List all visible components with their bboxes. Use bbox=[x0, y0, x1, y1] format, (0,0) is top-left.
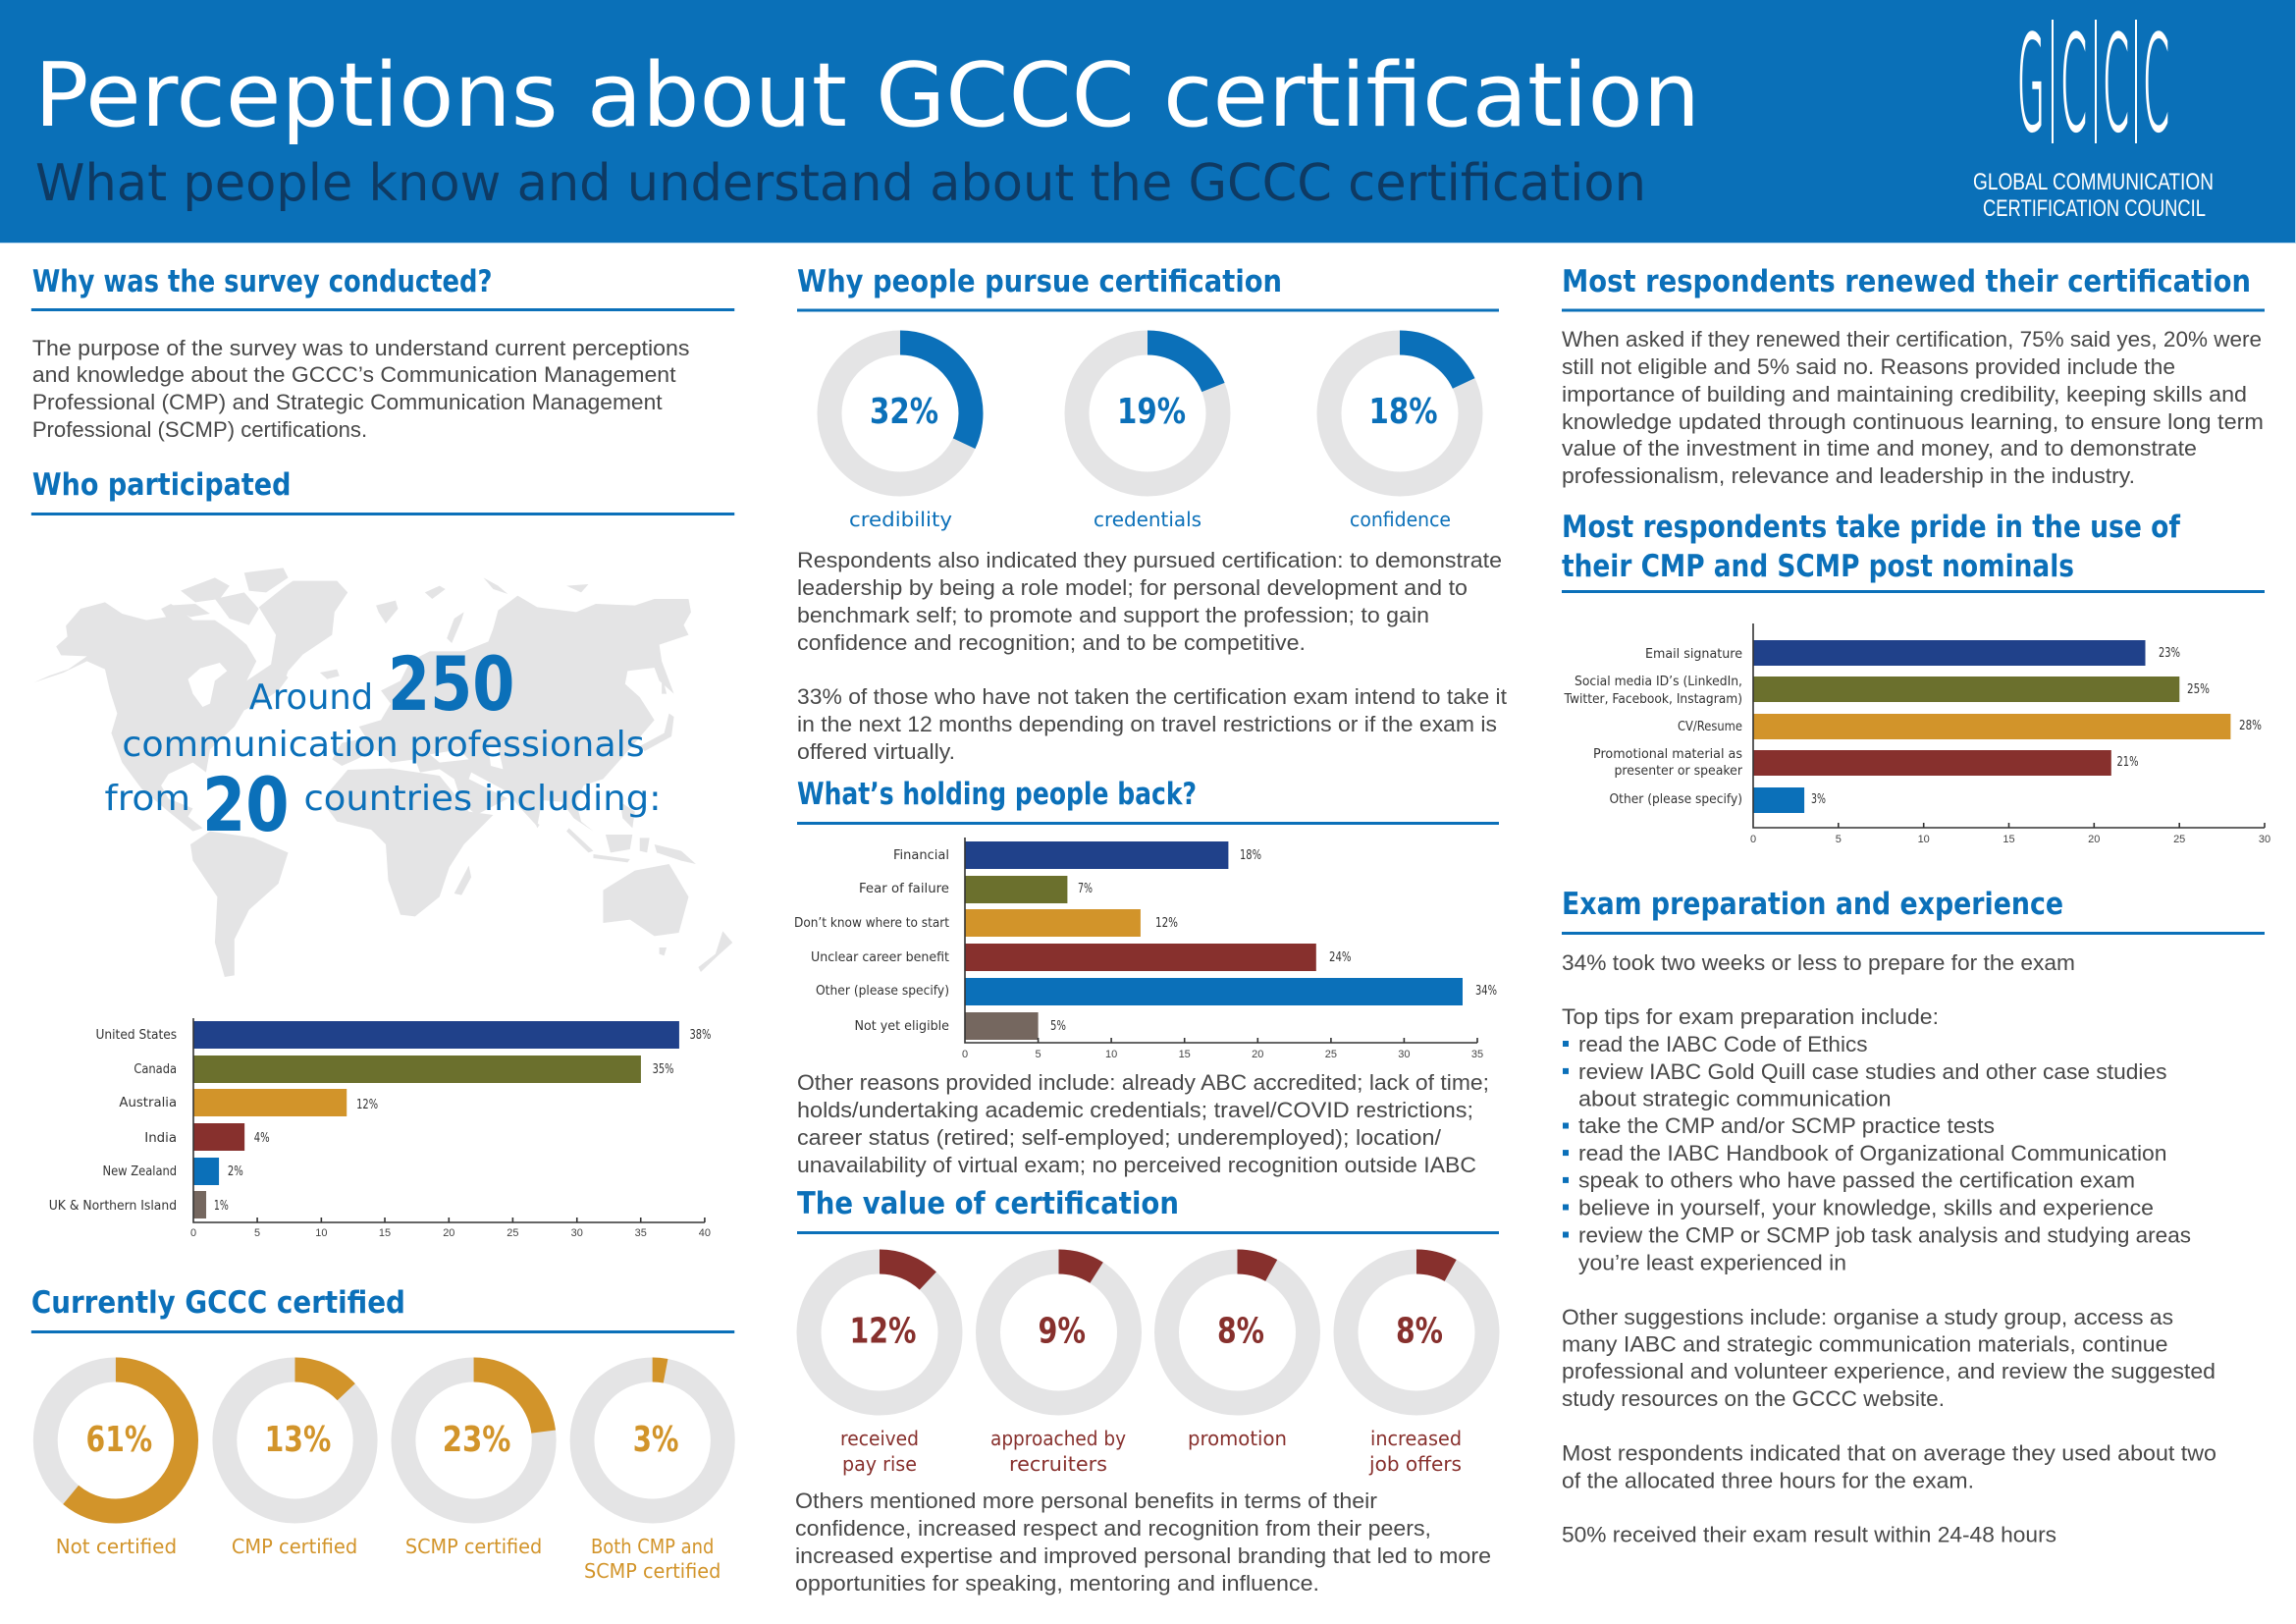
text: other suggestions: many IABC and strategic communication materials, continue bbox=[1562, 1331, 2167, 1357]
text: other suggestions: Other suggestions include: organise a study group, access as bbox=[1562, 1305, 2173, 1329]
donut: increased job offers 8%: 8% bbox=[1396, 1312, 1443, 1351]
text: exam time and results: of the allocated three hours for the exam. bbox=[1562, 1469, 1974, 1492]
heading: What’s holding people back? bbox=[797, 777, 1197, 812]
logo: GCCC: C bbox=[2143, 8, 2169, 161]
heading: Why people pursue certification bbox=[797, 264, 1282, 299]
bar: Other bbox=[1610, 787, 1826, 813]
bar chart: post nominal use: 5 bbox=[1836, 834, 1842, 845]
donut: received pay rise 12% bbox=[809, 1262, 950, 1476]
heading: Most respondents take pride in the use of bbox=[1562, 510, 2180, 545]
bar: New Zealand: New Zealand bbox=[102, 1164, 177, 1179]
heading: Currently GCCC certified bbox=[31, 1285, 405, 1321]
callout: participants: from bbox=[104, 779, 190, 819]
bar chart: post nominal use: 15 bbox=[2002, 834, 2015, 845]
text: other suggestions: study resources on the GCCC website. bbox=[1562, 1386, 1945, 1411]
bar: Financial bbox=[893, 841, 1261, 869]
text block: leadership by being a role model; for personal development and to bbox=[797, 575, 1468, 600]
text block: offered virtually. bbox=[797, 739, 955, 764]
text block: in the next 12 months depending on travel restrictions or if the exam is bbox=[797, 712, 1497, 736]
text block: professionalism, relevance and leadership in the industry. bbox=[1562, 463, 2135, 488]
bar: Canada: Canada bbox=[133, 1062, 177, 1077]
bar chart: countries: 15 bbox=[379, 1227, 391, 1239]
bar: Social media: 25% bbox=[2187, 681, 2210, 697]
text: exam time and results: Most respondents indicated that on average they used about two bbox=[1562, 1441, 2216, 1465]
bar chart: barriers: 35 bbox=[1471, 1049, 1483, 1060]
bulleted list: exam tips: review IABC Gold Quill case studies and other case studies bbox=[1578, 1059, 2167, 1084]
world map bbox=[34, 568, 732, 977]
bar: UK and Northern Island: UK & Northern Island bbox=[49, 1199, 177, 1214]
donut: CMP certified 13%: CMP certified bbox=[232, 1535, 357, 1558]
bar chart: countries bbox=[49, 1018, 712, 1239]
bar: Fear of failure bbox=[859, 876, 1093, 903]
text block: Professional (CMP) and Strategic Communication Management bbox=[32, 390, 663, 414]
donut: SCMP certified 23%: 23% bbox=[443, 1420, 510, 1460]
bar chart: post nominal use: 30 bbox=[2259, 834, 2270, 845]
text block: importance of building and maintaining credibility, keeping skills and bbox=[1562, 382, 2247, 406]
bulleted list: exam tips: about strategic communication bbox=[1578, 1086, 1891, 1111]
text: intro: 34% took two weeks or less to prepare for the exam bbox=[1562, 950, 2075, 975]
donut: received pay rise 12%: received bbox=[840, 1427, 919, 1450]
text block bbox=[797, 548, 1508, 764]
text block: Others mentioned more personal benefits in terms of their bbox=[795, 1489, 1378, 1513]
donut: approached by recruiters 9%: recruiters bbox=[1009, 1452, 1107, 1476]
bar: Social media bbox=[1564, 674, 2210, 707]
bar: Canada: 35% bbox=[653, 1062, 674, 1077]
bar: Not yet eligible: 5% bbox=[1050, 1018, 1066, 1034]
bar chart: barriers: 20 bbox=[1252, 1049, 1263, 1060]
text block: increased expertise and improved personal branding that led to more bbox=[795, 1543, 1491, 1568]
bar: Email signature: Email signature bbox=[1645, 646, 1742, 662]
logo: GCCC: C bbox=[2060, 8, 2087, 161]
donut: SCMP certified 23% bbox=[403, 1370, 544, 1558]
text block: value of the investment in time and money, and to demonstrate bbox=[1562, 436, 2197, 460]
text block: Professional (SCMP) certifications. bbox=[32, 417, 367, 442]
text block bbox=[797, 1070, 1489, 1177]
bar: Canada bbox=[133, 1056, 674, 1083]
text block: 33% of those who have not taken the certification exam intend to take it bbox=[797, 684, 1508, 709]
bar chart: countries: 30 bbox=[571, 1227, 583, 1239]
bar: CV/Resume: CV/Resume bbox=[1678, 719, 1742, 734]
callout: participants: countries including: bbox=[303, 779, 662, 819]
callout: participants: Around bbox=[249, 677, 373, 718]
bar: Social media: Social media ID’s (LinkedIn, bbox=[1575, 674, 1742, 689]
callout: participants: communication professionals bbox=[122, 725, 645, 765]
donut: SCMP certified 23%: SCMP certified bbox=[405, 1535, 542, 1558]
bar chart: barriers bbox=[794, 838, 1497, 1060]
donut: promotion 8% bbox=[1166, 1262, 1308, 1450]
donut: approached by recruiters 9%: approached by bbox=[990, 1427, 1126, 1450]
bar: Promotional material: 21% bbox=[2116, 754, 2139, 770]
text block: benchmark self; to promote and support the profession; to gain bbox=[797, 603, 1429, 627]
logo: GCCC: CERTIFICATION COUNCIL bbox=[1983, 195, 2206, 222]
text block: Respondents also indicated they pursued certification: to demonstrate bbox=[797, 548, 1502, 572]
bar chart: barriers: 30 bbox=[1398, 1049, 1411, 1060]
bar chart: barriers: 0 bbox=[962, 1049, 968, 1060]
text block bbox=[1562, 327, 2264, 488]
donut: CMP certified 13% bbox=[225, 1370, 365, 1558]
logo: GCCC bbox=[1973, 8, 2214, 222]
bar chart: post nominal use: 0 bbox=[1750, 834, 1756, 845]
donut: confidence 18%: confidence bbox=[1350, 508, 1451, 531]
panel: why was the survey conducted bbox=[31, 264, 734, 442]
bar: India: India bbox=[144, 1131, 177, 1146]
logo: GCCC: GLOBAL COMMUNICATION bbox=[1973, 169, 2214, 195]
donut: confidence 18%: 18% bbox=[1368, 392, 1437, 432]
logo: GCCC: G bbox=[2017, 8, 2045, 161]
bar: United States: 38% bbox=[689, 1028, 712, 1043]
bar chart: countries: 35 bbox=[635, 1227, 647, 1239]
bulleted list: exam tips: speak to others who have passed the certification exam bbox=[1578, 1168, 2135, 1192]
bar: Promotional material: Promotional material as bbox=[1593, 746, 1742, 762]
text block bbox=[795, 1489, 1491, 1596]
bar: Other bbox=[816, 978, 1497, 1005]
bar: Financial: 18% bbox=[1240, 847, 1261, 863]
bar: Australia bbox=[119, 1089, 378, 1116]
heading: Exam preparation and experience bbox=[1562, 887, 2063, 922]
bar chart: barriers: 15 bbox=[1179, 1049, 1191, 1060]
bar: Other: 3% bbox=[1811, 791, 1826, 807]
heading: The value of certification bbox=[797, 1186, 1179, 1221]
text block: When asked if they renewed their certification, 75% said yes, 20% were bbox=[1562, 327, 2262, 352]
bar: Unclear career benefit bbox=[811, 944, 1352, 971]
text block: and knowledge about the GCCC’s Communication Management bbox=[32, 362, 676, 387]
bar: New Zealand bbox=[102, 1158, 243, 1185]
subtitle: What people know and understand about the GCCC certification bbox=[35, 154, 1646, 213]
callout: participants: 20 bbox=[202, 762, 290, 848]
bar: Australia: Australia bbox=[119, 1096, 177, 1110]
bulleted list: exam tips: read the IABC Code of Ethics bbox=[1578, 1032, 1867, 1056]
bar: New Zealand: 2% bbox=[228, 1164, 243, 1179]
callout: participants bbox=[104, 641, 662, 848]
bar: Email signature: 23% bbox=[2159, 645, 2180, 661]
bar: Not yet eligible: Not yet eligible bbox=[854, 1018, 949, 1034]
bar chart: countries: 40 bbox=[699, 1227, 711, 1239]
text block: holds/undertaking academic credentials; travel/COVID restrictions; bbox=[797, 1098, 1473, 1122]
bar chart: barriers: 5 bbox=[1036, 1049, 1041, 1060]
donut: not certified 61%: Not certified bbox=[56, 1535, 177, 1558]
bar chart: post nominal use: 20 bbox=[2088, 834, 2100, 845]
heading bbox=[1562, 510, 2180, 584]
donut: received pay rise 12%: pay rise bbox=[842, 1452, 917, 1476]
bar chart: countries: 5 bbox=[254, 1227, 260, 1239]
donut: not certified 61%: 61% bbox=[86, 1420, 152, 1460]
donut: both certified 3% bbox=[582, 1370, 722, 1583]
panel: exam preparation and experience bbox=[1562, 887, 2265, 1547]
bulleted list: exam tips: believe in yourself, your knowledge, skills and experience bbox=[1578, 1196, 2154, 1219]
donut: credibility 32%: credibility bbox=[849, 508, 952, 531]
bar: UK and Northern Island bbox=[49, 1191, 229, 1218]
panel: currently GCCC certified bbox=[31, 1285, 734, 1583]
text block: opportunities for speaking, mentoring and influence. bbox=[795, 1571, 1319, 1596]
bar: Unclear career benefit: 24% bbox=[1329, 949, 1352, 965]
donut: increased job offers 8%: job offers bbox=[1368, 1452, 1462, 1476]
donut: credentials 19%: credentials bbox=[1094, 508, 1201, 531]
bar: Social media: Twitter, Facebook, Instagram) bbox=[1564, 691, 1742, 707]
header banner bbox=[0, 0, 2296, 244]
bulleted list: exam tips: you’re least experienced in bbox=[1578, 1251, 1846, 1274]
donut: increased job offers 8% bbox=[1346, 1262, 1487, 1476]
heading: Why was the survey conducted? bbox=[32, 264, 492, 299]
text block: The purpose of the survey was to understand current perceptions bbox=[32, 336, 689, 360]
bar: Email signature bbox=[1645, 640, 2180, 666]
donut: credibility 32% bbox=[829, 343, 971, 531]
donut: increased job offers 8%: increased bbox=[1370, 1427, 1462, 1450]
panel: what's holding people back bbox=[794, 777, 1499, 1177]
donut: credentials 19%: 19% bbox=[1117, 392, 1186, 432]
text: exam time and results bbox=[1562, 1441, 2216, 1547]
bar: Other: Other (please specify) bbox=[816, 983, 949, 999]
text block: Other reasons provided include: already ABC accredited; lack of time; bbox=[797, 1070, 1489, 1095]
panel: most respondents renewed bbox=[1562, 264, 2265, 488]
bar chart: post nominal use: 10 bbox=[1918, 834, 1930, 845]
text: exam time and results: 50% received their exam result within 24-48 hours bbox=[1562, 1522, 2056, 1547]
donut: promotion 8%: 8% bbox=[1217, 1312, 1264, 1351]
donut: both certified 3%: Both CMP and bbox=[591, 1535, 714, 1558]
bar: Fear of failure: Fear of failure bbox=[859, 881, 949, 896]
bar: Don't know where to start: 12% bbox=[1155, 915, 1178, 931]
donut: approached by recruiters 9% bbox=[988, 1262, 1129, 1476]
callout: participants: 250 bbox=[388, 641, 514, 728]
bar: Promotional material: presenter or speaker bbox=[1614, 763, 1742, 779]
text block: knowledge updated through continuous learning, to ensure long term bbox=[1562, 409, 2264, 434]
text: intro: Top tips for exam preparation include: bbox=[1562, 1004, 1939, 1029]
donut: credibility 32%: 32% bbox=[870, 392, 938, 432]
donut: both certified 3%: 3% bbox=[633, 1420, 679, 1460]
bar: Australia: 12% bbox=[356, 1098, 378, 1112]
donut: confidence 18% bbox=[1329, 343, 1470, 531]
bar chart: barriers: 10 bbox=[1105, 1049, 1117, 1060]
text: intro bbox=[1562, 950, 2075, 1029]
bar chart: post nominal use bbox=[1564, 623, 2270, 845]
bar: Financial: Financial bbox=[893, 847, 949, 863]
donut: approached by recruiters 9%: 9% bbox=[1039, 1312, 1086, 1351]
bar: CV/Resume: 28% bbox=[2239, 718, 2262, 733]
bar chart: countries: 20 bbox=[443, 1227, 454, 1239]
bar: UK and Northern Island: 1% bbox=[214, 1199, 229, 1214]
bar: India: 4% bbox=[254, 1131, 270, 1146]
text block: unavailability of virtual exam; no perceived recognition outside IABC bbox=[797, 1153, 1476, 1177]
panel: who participated bbox=[31, 467, 734, 1239]
logo: GCCC: C bbox=[2103, 8, 2129, 161]
bar chart: countries: 25 bbox=[507, 1227, 518, 1239]
bulleted list: exam tips: read the IABC Handbook of Organizational Communication bbox=[1578, 1141, 2167, 1165]
bar chart: post nominal use: 25 bbox=[2173, 834, 2185, 845]
bar: Other: Other (please specify) bbox=[1610, 791, 1742, 807]
text block: still not eligible and 5% said no. Reasons provided include the bbox=[1562, 354, 2175, 379]
text block: confidence, increased respect and recognition from their peers, bbox=[795, 1516, 1431, 1541]
bar: Don't know where to start bbox=[794, 909, 1178, 937]
title: Perceptions about GCCC certification bbox=[34, 44, 1700, 147]
bar: CV/Resume bbox=[1678, 714, 2262, 739]
bulleted list: exam tips bbox=[1563, 1032, 2191, 1274]
text: other suggestions: professional and volunteer experience, and review the suggested bbox=[1562, 1359, 2216, 1383]
text block: career status (retired; self-employed; underemployed); location/ bbox=[797, 1125, 1442, 1150]
donut: not certified 61% bbox=[45, 1370, 187, 1558]
bulleted list: exam tips: review the CMP or SCMP job task analysis and studying areas bbox=[1578, 1223, 2191, 1247]
bar: United States bbox=[96, 1021, 712, 1049]
donut: received pay rise 12%: 12% bbox=[850, 1312, 917, 1351]
bar: Promotional material bbox=[1593, 746, 2139, 779]
donut: both certified 3%: SCMP certified bbox=[584, 1559, 721, 1583]
bar: Fear of failure: 7% bbox=[1078, 881, 1093, 896]
panel: the value of certification bbox=[795, 1186, 1499, 1596]
donut: promotion 8%: promotion bbox=[1188, 1427, 1287, 1450]
text block: confidence and recognition; and to be competitive. bbox=[797, 630, 1306, 655]
bar: Unclear career benefit: Unclear career benefit bbox=[811, 949, 949, 965]
donut: credentials 19% bbox=[1077, 343, 1218, 531]
bar: United States: United States bbox=[96, 1028, 177, 1043]
bar: Not yet eligible bbox=[854, 1012, 1066, 1040]
bar: Other: 34% bbox=[1475, 983, 1497, 999]
heading: Who participated bbox=[32, 467, 292, 503]
panel: post nominals bbox=[1562, 510, 2270, 845]
panel: why people pursue certification bbox=[797, 264, 1508, 764]
bulleted list: exam tips: take the CMP and/or SCMP practice tests bbox=[1578, 1113, 1995, 1138]
text: other suggestions bbox=[1562, 1305, 2216, 1411]
bar: Don't know where to start: Don’t know where to start bbox=[794, 915, 949, 931]
heading: their CMP and SCMP post nominals bbox=[1562, 549, 2074, 584]
bar chart: countries: 10 bbox=[315, 1227, 327, 1239]
bar: India bbox=[144, 1123, 270, 1151]
text block bbox=[32, 336, 689, 442]
donut: CMP certified 13%: 13% bbox=[265, 1420, 331, 1460]
bar chart: barriers: 25 bbox=[1325, 1049, 1337, 1060]
bar chart: countries: 0 bbox=[190, 1227, 196, 1239]
